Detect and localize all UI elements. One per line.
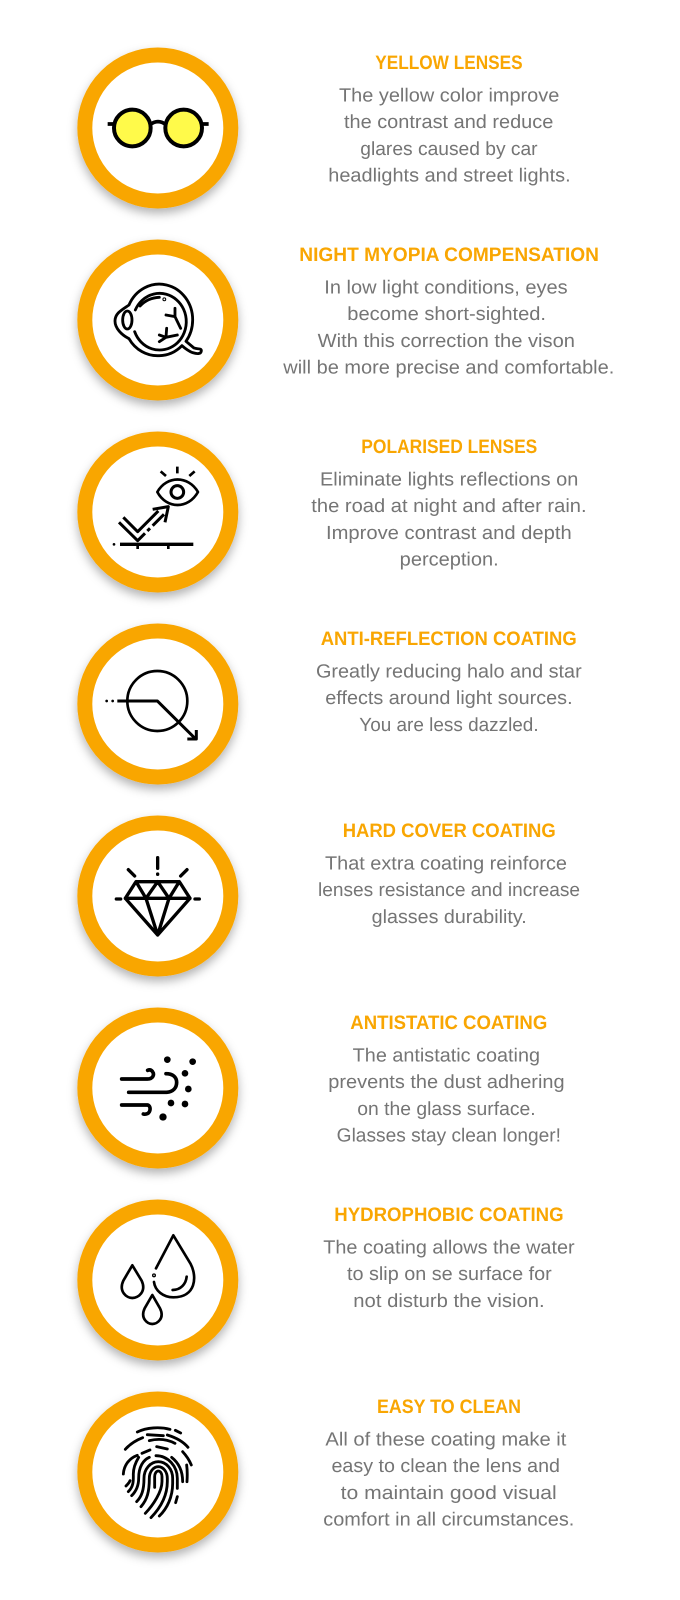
- icon: fingerprint: [123, 1428, 191, 1518]
- heading: hydrophobic: HYDROPHOBIC COATING: [334, 1204, 564, 1226]
- text block: polarised: [311, 469, 587, 571]
- text block: hard cover: That extra coating reinforce: [325, 853, 567, 874]
- text block: polarised: Improve contrast and depth: [326, 523, 572, 544]
- text block: easy to clean: comfort in all circumstances.: [323, 1510, 574, 1531]
- text block: hard cover: glasses durability.: [372, 907, 527, 928]
- panel: anti-reflection coating: [85, 628, 582, 777]
- heading: polarised: POLARISED LENSES: [361, 436, 537, 458]
- icon: water drops: [122, 1235, 194, 1324]
- text block: yellow lenses: The yellow color improve: [339, 85, 559, 106]
- badge: hard cover: [85, 823, 231, 969]
- text block: easy to clean: easy to clean the lens and: [332, 1456, 560, 1477]
- badge: easy to clean: [85, 1399, 231, 1545]
- panel: yellow lenses: [85, 52, 571, 201]
- badge: yellow lenses: [85, 55, 231, 201]
- panel: hard cover coating: [85, 820, 580, 969]
- panel: antistatic coating: [85, 1012, 565, 1161]
- heading: yellow lenses: YELLOW LENSES: [375, 52, 523, 74]
- heading: hard cover: HARD COVER COATING: [343, 820, 556, 842]
- badge: polarised: [85, 439, 231, 585]
- icon: diamond: [116, 858, 199, 935]
- badge: hydrophobic: [85, 1207, 231, 1353]
- text block: easy to clean: All of these coating make it: [325, 1429, 567, 1450]
- panel: hydrophobic coating: [85, 1204, 575, 1353]
- text block: night myopia: In low light conditions, eyes: [324, 277, 568, 298]
- text block: yellow lenses: headlights and street lights.: [328, 166, 571, 187]
- text block: antistatic: prevents the dust adhering: [328, 1072, 565, 1093]
- text block: night myopia: [282, 277, 614, 379]
- text block: antistatic: on the glass surface.: [357, 1099, 536, 1120]
- panel: night myopia compensation: [85, 244, 614, 393]
- heading: easy to clean: EASY TO CLEAN: [377, 1396, 521, 1418]
- text block: hard cover: [318, 853, 580, 928]
- icon: round glasses: [108, 110, 209, 146]
- text block: antistatic: The antistatic coating: [353, 1045, 540, 1066]
- text block: yellow lenses: glares caused by car: [360, 139, 538, 160]
- text block: night myopia: will be more precise and comfortable.: [282, 358, 614, 379]
- text block: polarised: perception.: [400, 550, 499, 571]
- icon: eye and reflected ray: [113, 467, 198, 549]
- icon: ray through lens: [105, 671, 196, 739]
- text block: anti-reflection: [316, 661, 582, 736]
- text block: hydrophobic: The coating allows the water: [323, 1237, 575, 1258]
- text block: antistatic: Glasses stay clean longer!: [337, 1126, 561, 1147]
- heading: anti-reflection: ANTI-REFLECTION COATING: [321, 628, 577, 650]
- text block: polarised: the road at night and after rain.: [311, 496, 587, 517]
- heading: antistatic: ANTISTATIC COATING: [350, 1012, 547, 1034]
- text block: hydrophobic: [323, 1237, 575, 1312]
- badge: antistatic: [85, 1015, 231, 1161]
- icon: wind and dust: [122, 1056, 196, 1121]
- heading: night myopia: NIGHT MYOPIA COMPENSATION: [299, 244, 599, 266]
- panel: easy to clean: [85, 1396, 574, 1545]
- text block: night myopia: become short-sighted.: [347, 304, 546, 325]
- text block: antistatic: [328, 1045, 565, 1147]
- text block: easy to clean: to maintain good visual: [341, 1483, 557, 1504]
- text block: anti-reflection: effects around light sources.: [325, 688, 573, 709]
- text block: anti-reflection: You are less dazzled.: [359, 715, 539, 736]
- panel: polarised lenses: [85, 436, 587, 585]
- badge: night myopia: [85, 247, 231, 393]
- text block: yellow lenses: [328, 85, 571, 187]
- text block: easy to clean: [323, 1429, 574, 1531]
- badge: anti-reflection: [85, 631, 231, 777]
- text block: hydrophobic: to slip on se surface for: [347, 1264, 552, 1285]
- text block: night myopia: With this correction the vison: [318, 331, 575, 352]
- text block: hydrophobic: not disturb the vision.: [353, 1291, 545, 1312]
- text block: anti-reflection: Greatly reducing halo and star: [316, 661, 582, 682]
- text block: yellow lenses: the contrast and reduce: [344, 112, 553, 133]
- text block: hard cover: lenses resistance and increase: [318, 880, 580, 901]
- text block: polarised: Eliminate lights reflections on: [320, 469, 578, 490]
- icon: eyeball: [115, 284, 201, 356]
